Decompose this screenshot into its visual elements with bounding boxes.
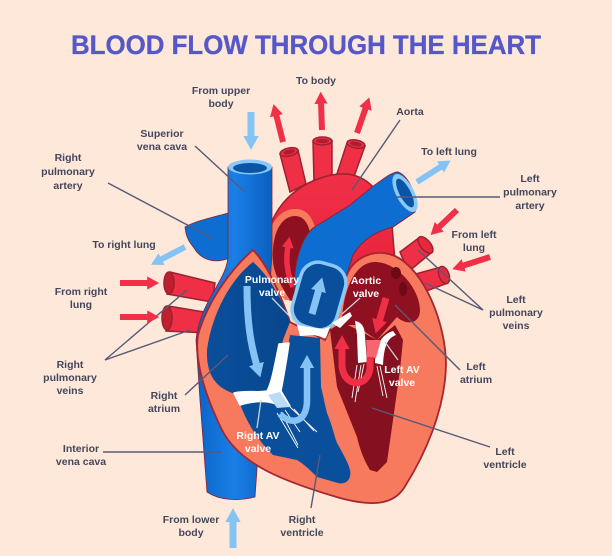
label: from lower body: body	[178, 527, 204, 539]
label: left pulmonary veins: Left	[506, 294, 526, 306]
label: right pulmonary artery: artery	[53, 180, 83, 192]
label: left ventricle: Left	[495, 446, 515, 458]
label: right pulmonary artery: pulmonary	[41, 166, 95, 178]
heart body	[197, 250, 446, 503]
label: right atrium: atrium	[148, 403, 180, 415]
label: to body: To body	[296, 75, 336, 87]
right pulmonary veins	[162, 272, 215, 333]
label: from left lung: lung	[463, 242, 485, 254]
label: left AV valve: valve	[389, 377, 415, 389]
title: BLOOD FLOW THROUGH THE HEART	[71, 30, 541, 60]
label: from upper body: body	[208, 98, 234, 110]
left pulmonary veins	[400, 234, 452, 294]
mitral opening	[366, 340, 381, 358]
arrow: from right lung lower	[120, 314, 149, 320]
label: left pulmonary artery: pulmonary	[503, 186, 557, 198]
right valves	[234, 325, 330, 448]
label: from upper body: From upper	[192, 85, 250, 97]
arrow: from left lung upper	[438, 210, 457, 228]
right atrium flow arrow	[247, 286, 257, 366]
left valves	[332, 312, 396, 402]
left atrium chamber	[342, 262, 420, 340]
label: right ventricle: Right	[289, 514, 315, 526]
label: right AV valve: valve	[245, 443, 271, 455]
label: aorta: Aorta	[396, 106, 424, 118]
arrow: from right lung upper	[120, 280, 149, 286]
valve leader lines	[257, 298, 398, 428]
label: interior vena cava: Interior	[63, 443, 99, 455]
label: right pulmonary veins: pulmonary	[43, 372, 97, 384]
aorta lumen	[267, 209, 318, 300]
label: left AV valve: Left AV	[384, 364, 420, 376]
label: from right lung: lung	[70, 299, 92, 311]
leader lines	[103, 120, 500, 508]
label: right pulmonary veins: veins	[57, 385, 84, 397]
label: left pulmonary artery: artery	[515, 200, 545, 212]
label: to right lung: To right lung	[92, 239, 156, 251]
label: pulmonary valve: Pulmonary	[245, 274, 299, 286]
label: left atrium: Left	[466, 361, 486, 373]
label: right ventricle: ventricle	[280, 527, 324, 539]
label: from lower body: From lower	[163, 514, 219, 526]
label: superior vena cava: vena cava	[137, 141, 187, 153]
pulmonary artery trunk	[294, 172, 416, 325]
label: from right lung: From right	[55, 286, 107, 298]
left ventricle flow arrow	[342, 347, 370, 383]
label: left pulmonary veins: pulmonary	[489, 307, 543, 319]
arrow: to left lung	[417, 166, 442, 182]
arrow: to right lung	[160, 247, 185, 260]
label: left pulmonary veins: veins	[503, 320, 530, 332]
arrow: from left lung lower	[462, 257, 490, 266]
label: right pulmonary veins: Right	[57, 359, 83, 371]
pulmonary artery opening	[387, 170, 423, 216]
label: superior vena cava: Superior	[140, 128, 184, 140]
vena cava	[196, 167, 272, 500]
label: to left lung: To left lung	[421, 146, 477, 158]
arrow: from upper body	[248, 112, 254, 138]
arrow: to body left	[276, 114, 283, 142]
label: right atrium: Right	[151, 390, 177, 402]
arrow: to body centre	[321, 102, 322, 130]
pulmonary chamber capsule	[288, 258, 350, 334]
right atrium chamber	[207, 262, 290, 394]
right pulmonary artery	[185, 212, 232, 261]
label: aortic valve: valve	[353, 288, 379, 300]
label: from left lung: From left	[452, 229, 496, 241]
left ventricle chamber	[330, 322, 403, 472]
aorta with branches	[265, 137, 395, 300]
label: left pulmonary artery: Left	[520, 173, 540, 185]
label: right AV valve: Right AV	[236, 430, 280, 442]
label: interior vena cava: vena cava	[56, 456, 106, 468]
aortic flow arrow	[379, 298, 386, 322]
superior vena cava opening	[228, 160, 272, 174]
label: pulmonary valve: valve	[259, 287, 285, 299]
arrow: to body right	[357, 107, 366, 133]
label: left ventricle: ventricle	[483, 459, 527, 471]
label: left atrium: atrium	[460, 374, 492, 386]
label: right pulmonary artery: Right	[55, 152, 81, 164]
label: aortic valve: Aortic	[351, 275, 381, 287]
arrow: from lower body	[230, 520, 236, 548]
right ventricle flow arrow	[280, 366, 307, 421]
right ventricle chamber	[240, 335, 350, 483]
